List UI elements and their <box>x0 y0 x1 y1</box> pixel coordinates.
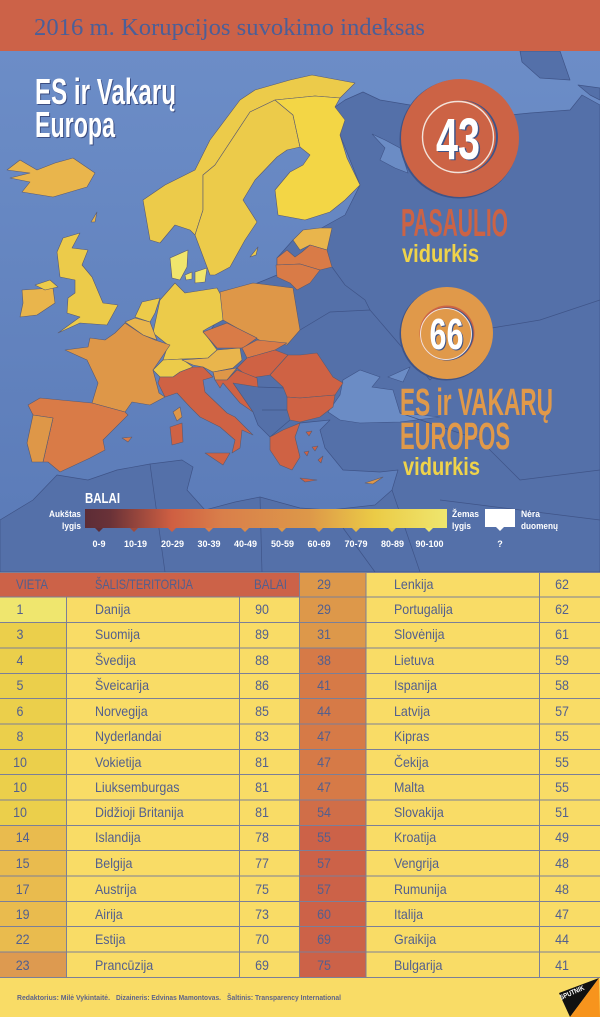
column: right countries: Kipras <box>394 728 430 744</box>
column: left countries: Nyderlandai <box>95 728 162 744</box>
column: left countries: Prancūzija <box>95 957 154 973</box>
map: eastern borders <box>150 267 600 572</box>
column: left countries: Estija <box>95 931 126 947</box>
column: left countries: Švedija <box>95 652 136 668</box>
column: left ranks: 8 <box>17 728 23 744</box>
footer credits: Redaktorius: Milė Vykintaitė. <box>17 993 110 1002</box>
legend: ? <box>497 539 503 549</box>
column: right scores: 49 <box>555 829 569 845</box>
callout: EU average: 66 <box>430 310 464 359</box>
country: Lithuania <box>276 264 320 290</box>
column: left scores: 81 <box>255 779 269 795</box>
column: right ranks: 38 <box>317 652 331 668</box>
column: right ranks: 69 <box>317 931 331 947</box>
callout: EU average: vidurkis <box>403 453 480 481</box>
column: right scores: 44 <box>555 931 569 947</box>
column: right countries: Slovakija <box>394 804 444 820</box>
column: right countries: Bulgarija <box>394 957 443 973</box>
rank column left fills <box>0 597 66 977</box>
callout: world average: vidurkis <box>402 240 479 268</box>
column: left countries: Norvegija <box>95 703 148 719</box>
country: Hungary <box>237 350 288 378</box>
column: right countries: Rumunija <box>394 881 447 897</box>
column: left ranks: 10 <box>13 754 27 770</box>
column: right ranks: 55 <box>317 829 331 845</box>
legend: 70-79 <box>344 539 368 549</box>
country: Sweden <box>195 100 300 275</box>
column: left scores: 83 <box>255 728 269 744</box>
footer credits: Šaltinis: Transparency International <box>227 993 341 1002</box>
country: Poland <box>220 283 300 345</box>
country: United Kingdom <box>35 233 118 333</box>
country: Greece <box>270 423 323 482</box>
column: left scores: 70 <box>255 931 269 947</box>
country: Portugal <box>27 415 53 462</box>
column: left ranks: 10 <box>13 779 27 795</box>
column: left ranks: 1 <box>17 601 23 617</box>
column: left ranks: 5 <box>17 677 23 693</box>
panel: map background <box>0 51 600 572</box>
country: Estonia <box>293 228 332 250</box>
table header labels <box>16 576 287 592</box>
legend: lygis <box>62 521 81 531</box>
column: right scores: 57 <box>555 703 569 719</box>
column: left scores: 88 <box>255 652 269 668</box>
column: right scores: 55 <box>555 754 569 770</box>
column: left ranks <box>13 601 30 973</box>
column: right countries: Italija <box>394 906 424 922</box>
column: left countries: Danija <box>95 601 131 617</box>
column: left countries: Islandija <box>95 829 141 845</box>
country: Bulgaria <box>287 395 335 422</box>
callout: EU average: 66 <box>430 311 464 360</box>
column: right ranks: 57 <box>317 855 331 871</box>
footer credits <box>17 993 341 1002</box>
column: left countries: Didžioji Britanija <box>95 804 184 820</box>
country: Italy <box>158 367 253 465</box>
column: right ranks: 54 <box>317 804 331 820</box>
header bar <box>0 0 600 51</box>
column: right scores: 48 <box>555 881 569 897</box>
panel: ranking table <box>0 572 600 1017</box>
column: left scores: 81 <box>255 804 269 820</box>
column: left ranks: 23 <box>16 957 30 973</box>
column: right scores: 55 <box>555 779 569 795</box>
column: right scores: 61 <box>555 626 569 642</box>
column: left ranks: 15 <box>16 855 30 871</box>
column: right countries: Latvija <box>394 703 431 719</box>
column: left countries: Austrija <box>95 881 137 897</box>
column: left ranks: 17 <box>16 881 30 897</box>
map: non-data land <box>0 51 600 572</box>
column: right scores <box>555 576 569 973</box>
legend <box>49 490 558 549</box>
column: left countries <box>95 601 184 973</box>
map: White Sea and Black Sea <box>328 134 440 423</box>
column: right ranks: 41 <box>317 677 331 693</box>
column: left scores <box>255 601 269 973</box>
column: left ranks: 4 <box>17 652 23 668</box>
title: 2016 m. Korupcijos suvokimo indeksas <box>34 15 425 41</box>
column: right ranks: 29 <box>317 601 331 617</box>
heading: region: Europa <box>35 104 116 145</box>
legend: 10-19 <box>124 539 147 549</box>
column: left scores: 77 <box>255 855 269 871</box>
column: left ranks: 14 <box>16 829 30 845</box>
country: Norway <box>143 75 355 243</box>
country: Spain <box>28 398 132 472</box>
callout: world average <box>400 79 519 268</box>
column: left scores: 73 <box>255 906 269 922</box>
country: Austria <box>182 348 242 372</box>
heading: region <box>35 71 177 146</box>
column: right countries: Lietuva <box>394 652 435 668</box>
legend: 60-69 <box>307 539 331 549</box>
column: right countries: Ispanija <box>394 677 438 693</box>
column: right countries: Kroatija <box>394 829 437 845</box>
column: left scores: 86 <box>255 677 269 693</box>
column: right scores: 58 <box>555 677 569 693</box>
column: right ranks: 31 <box>317 626 331 642</box>
column: right countries: Lenkija <box>394 576 434 592</box>
country: Denmark <box>170 250 207 283</box>
table header labels: BALAI <box>254 576 287 592</box>
country: Croatia <box>215 370 258 412</box>
column: right scores: 51 <box>555 804 569 820</box>
column: right scores: 59 <box>555 652 569 668</box>
column: right countries: Čekija <box>394 754 429 770</box>
colour scale <box>85 509 447 532</box>
no-data swatch <box>485 509 515 531</box>
country: Germany <box>153 283 223 360</box>
column: right countries: Slovėnija <box>394 626 445 642</box>
heading: region: ES ir Vakarų <box>36 72 177 113</box>
column: left scores: 75 <box>255 881 269 897</box>
legend: lygis <box>452 521 471 531</box>
logo: Sputnik: SPUTNIK <box>559 985 586 1002</box>
callout: world average: 43 <box>438 108 482 173</box>
callout: EU average: EUROPOS <box>400 416 510 458</box>
country: Corsica <box>173 407 182 421</box>
table header labels: ŠALIS/TERITORIJA <box>95 576 194 592</box>
column: left scores: 69 <box>255 957 269 973</box>
logo: Sputnik <box>559 978 600 1017</box>
legend: Aukštas <box>49 509 81 519</box>
column: right ranks: 60 <box>317 906 331 922</box>
column: right ranks: 47 <box>317 779 331 795</box>
country: France <box>65 323 170 412</box>
column: left scores: 78 <box>255 829 269 845</box>
column: right ranks: 44 <box>317 703 331 719</box>
country: Cyprus <box>365 477 383 484</box>
column: left scores: 85 <box>255 703 269 719</box>
column: right ranks: 47 <box>317 754 331 770</box>
country: Gotland <box>250 247 258 257</box>
column: right countries: Graikija <box>394 931 437 947</box>
legend: 40-49 <box>234 539 257 549</box>
legend: 20-29 <box>161 539 184 549</box>
column: left countries: Airija <box>95 906 123 922</box>
country: Netherlands <box>135 298 160 322</box>
legend: 90-100 <box>415 539 444 549</box>
column: right scores: 48 <box>555 855 569 871</box>
rank column right fills <box>299 572 366 977</box>
map: countries <box>7 75 383 484</box>
grid lines <box>0 572 600 978</box>
callout: EU average <box>400 287 553 481</box>
column: right countries <box>394 576 453 973</box>
column: left ranks: 3 <box>17 626 23 642</box>
legend: BALAI <box>85 490 120 507</box>
country: Slovakia <box>242 340 287 358</box>
column: left countries: Vokietija <box>95 754 142 770</box>
country: Czechia <box>203 323 257 348</box>
column: right scores: 62 <box>555 576 569 592</box>
heading: region: Europa <box>36 105 117 146</box>
legend: 50-59 <box>271 539 294 549</box>
column: right ranks: 75 <box>317 957 331 973</box>
legend: Nėra <box>521 509 541 519</box>
column: right scores: 47 <box>555 906 569 922</box>
column: left countries: Belgija <box>95 855 133 871</box>
callout: world average: 43 <box>436 107 480 172</box>
column: right countries: Malta <box>394 779 425 795</box>
column: right ranks: 47 <box>317 728 331 744</box>
country: Finland <box>275 96 360 220</box>
country: Switzerland <box>153 359 193 377</box>
column: left scores: 89 <box>255 626 269 642</box>
column: right scores: 41 <box>555 957 569 973</box>
column: left countries: Suomija <box>95 626 141 642</box>
legend: 30-39 <box>197 539 221 549</box>
country: Ireland <box>20 288 55 317</box>
column: right ranks <box>317 576 331 973</box>
legend: 80-89 <box>381 539 404 549</box>
column: right scores: 55 <box>555 728 569 744</box>
column: left countries: Liuksemburgas <box>95 779 180 795</box>
footer credits: Dizaineris: Edvinas Mamontovas. <box>116 993 221 1002</box>
table header labels: VIETA <box>16 576 49 592</box>
column: left ranks: 6 <box>17 703 23 719</box>
column: left scores: 81 <box>255 754 269 770</box>
column: right countries: Vengrija <box>394 855 440 871</box>
column: left countries: Šveicarija <box>95 677 150 693</box>
table header <box>0 572 299 597</box>
country: Faroe <box>91 212 97 222</box>
column: left ranks: 10 <box>13 804 27 820</box>
country: Slovenia <box>213 368 237 380</box>
column: left scores: 90 <box>255 601 269 617</box>
column: right scores: 62 <box>555 601 569 617</box>
country: Romania <box>270 353 343 398</box>
callout: world average: PASAULIO <box>401 202 508 245</box>
legend: Žemas <box>452 508 479 519</box>
country: Latvia <box>277 245 332 270</box>
column: left ranks: 22 <box>16 931 30 947</box>
column: right ranks: 29 <box>317 576 331 592</box>
column: left ranks: 19 <box>16 906 30 922</box>
legend: duomenų <box>521 521 558 531</box>
heading: region: ES ir Vakarų <box>35 71 176 112</box>
column: right ranks: 57 <box>317 881 331 897</box>
column: right countries: Portugalija <box>394 601 453 617</box>
legend: 0-9 <box>92 539 106 549</box>
country: Belgium <box>125 318 157 340</box>
country: Iceland <box>7 158 95 197</box>
